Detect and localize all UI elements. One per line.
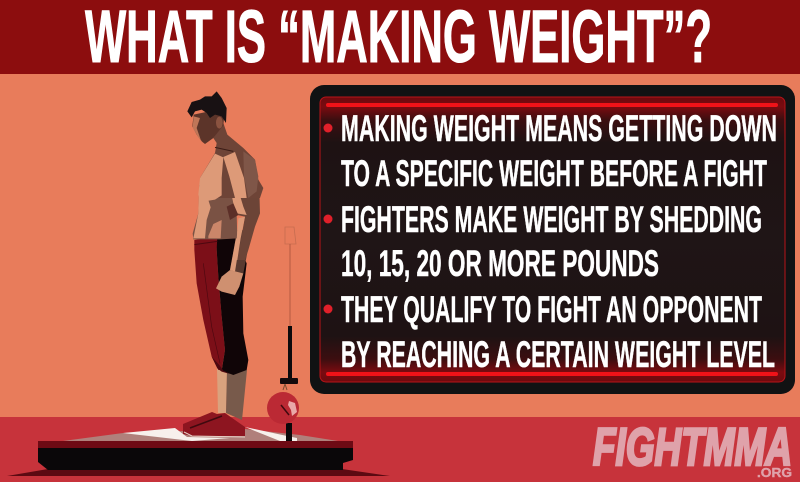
fighter figure (183, 91, 263, 437)
forearm and hand (230, 230, 252, 273)
back and arm (230, 177, 260, 260)
gauge top outline (285, 227, 296, 244)
legs (217, 368, 227, 413)
hair (187, 91, 227, 123)
bullet 2 (324, 199, 762, 284)
bullet 1 (324, 108, 777, 194)
bullet 3 (324, 289, 775, 375)
shoes (183, 412, 245, 436)
header banner (0, 0, 800, 78)
weight gauge on pole (267, 227, 299, 441)
info panel (310, 85, 795, 394)
torso (193, 177, 260, 260)
neon bars (326, 103, 778, 107)
logo: .ORG (757, 465, 792, 480)
pants (194, 230, 252, 375)
head, neck and chest (187, 91, 263, 202)
inner glow frame (320, 97, 785, 382)
floor (0, 417, 800, 482)
face (192, 108, 225, 144)
scale platform (7, 427, 390, 476)
background wall (0, 74, 800, 417)
